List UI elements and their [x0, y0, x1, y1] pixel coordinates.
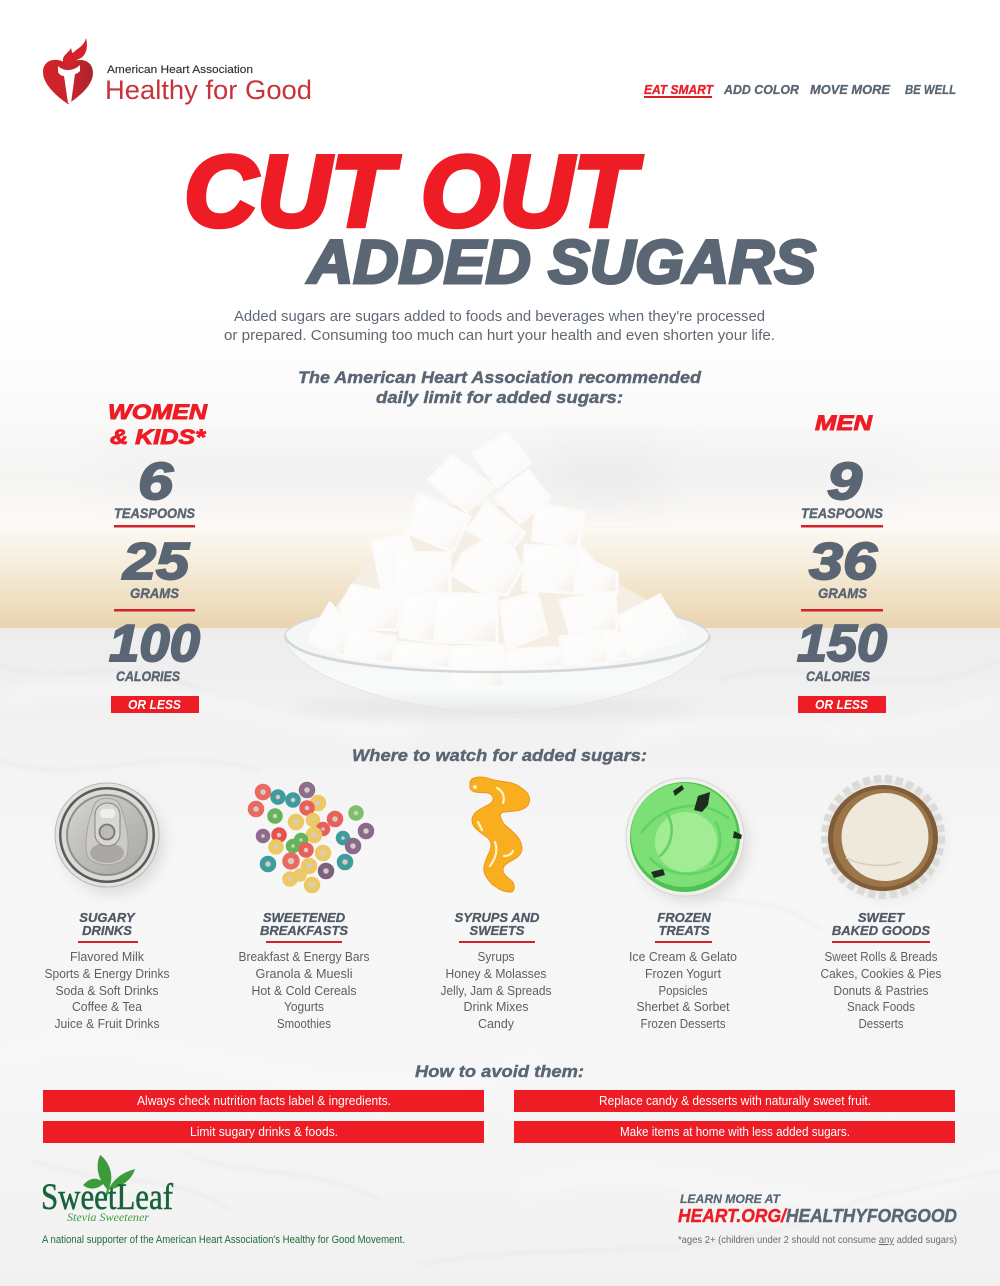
logo: SweetLeaf: [41, 1155, 405, 1246]
category title: sweet baked goods: [832, 910, 930, 943]
badge: or less: [111, 696, 199, 713]
category title: sweet baked goods: SWEET: [858, 910, 905, 925]
heading: recommended daily limit: daily limit for added sugars:: [376, 388, 623, 407]
category title: sweet baked goods: BAKED GOODS: [832, 923, 930, 938]
category title: frozen treats: TREATS: [658, 923, 710, 938]
tip: check nutrition label: Always check nutrition facts label & ingredients.: [137, 1094, 391, 1108]
category title: frozen treats: FROZEN: [657, 910, 711, 925]
icon: frosted cupcake: [825, 779, 944, 899]
category title: sweetened breakfasts: SWEETENED: [263, 910, 346, 925]
list: sweet baked goods: Sweet Rolls & Breads: [824, 950, 938, 964]
panel: women and kids limits: [108, 401, 208, 713]
badge: or less: OR LESS: [815, 697, 868, 712]
text: national supporter: A national supporter of the American Heart Association's Healthy for Good Movement.: [42, 1234, 405, 1246]
stat: 9 teaspoons: 9: [827, 453, 862, 511]
tip: check nutrition label: [43, 1090, 484, 1112]
sugar cubes: [308, 432, 687, 687]
tip: replace candy: [514, 1090, 955, 1112]
badge: or less: OR LESS: [128, 697, 181, 712]
text: Stevia Sweetener: Stevia Sweetener: [67, 1212, 150, 1224]
icon: fruit cereal loops: [250, 784, 372, 890]
panel: men limits: [797, 412, 887, 713]
stat: 9 teaspoons: [801, 453, 884, 521]
list: sweetened breakfasts: Yogurts: [284, 1000, 324, 1014]
plate back rim: [285, 600, 709, 672]
background: marble counter: [0, 628, 1000, 1286]
heading: women and kids: [108, 401, 208, 449]
icon: syrup drizzle: [470, 777, 530, 892]
list: frozen treats: Frozen Desserts: [640, 1017, 726, 1031]
tip: limit sugary drinks: [43, 1121, 484, 1143]
category title: frozen treats: [655, 910, 712, 943]
category title: sweetened breakfasts: [260, 910, 348, 943]
text: Healthy for Good: Healthy for Good: [105, 75, 312, 105]
plate front rim: [285, 636, 710, 672]
stat: 150 calories: CALORIES: [806, 668, 871, 684]
panel: sugary drinks: [44, 783, 170, 1031]
category title: sugary drinks: DRINKS: [82, 923, 132, 938]
tips: how to avoid added sugars: [43, 1090, 955, 1143]
stat: 25 grams: 25: [122, 533, 190, 591]
call to action: learn more: [678, 1192, 957, 1246]
heading: how to avoid them: How to avoid them:: [415, 1062, 584, 1081]
list: frozen treats: Popsicles: [658, 984, 708, 998]
tip: limit sugary drinks: Limit sugary drinks & foods.: [190, 1125, 338, 1139]
list: sweetened breakfasts: [238, 950, 370, 1031]
list: sugary drinks: [44, 950, 170, 1031]
heading: women and kids: WOMEN: [108, 401, 208, 424]
text: SweetLeaf: SweetLeaf: [41, 1177, 174, 1218]
nav item: Be Well: BE WELL: [905, 82, 956, 97]
stat: 36 grams: GRAMS: [818, 585, 868, 601]
category title: syrups and sweets: [455, 910, 540, 943]
icon: heart and torch: [43, 38, 93, 104]
tip: replace candy: Replace candy & desserts with naturally sweet fruit.: [599, 1094, 871, 1108]
list: sweet baked goods: Donuts & Pastries: [834, 984, 928, 998]
stat: 150 calories: 150: [797, 615, 887, 673]
panel: sweetened breakfasts: [238, 784, 372, 1031]
text: learn more at: LEARN MORE AT: [680, 1192, 782, 1206]
navigation: [644, 82, 956, 98]
nav item: Eat Smart (active): EAT SMART: [644, 82, 714, 97]
icon: stevia leaves: [83, 1155, 135, 1197]
heading: men: MEN: [815, 412, 873, 435]
list: sweetened breakfasts: Hot & Cold Cereals: [252, 984, 356, 998]
list: sweet baked goods: Snack Foods: [847, 1000, 915, 1014]
list: sweet baked goods: Desserts: [858, 1017, 904, 1031]
badge: or less: [798, 696, 886, 713]
text: American Heart Association: American Heart Association: [107, 64, 253, 76]
list: sugary drinks: Coffee & Tea: [72, 1000, 142, 1014]
background: blurred kitchen wall: [0, 0, 1000, 630]
list: sweet baked goods: [820, 950, 942, 1031]
list: sweetened breakfasts: Breakfast & Energy Bars: [238, 950, 370, 964]
stat: 36 grams: 36: [809, 533, 878, 591]
plate shadow: [292, 699, 702, 717]
list: syrups and sweets: [440, 950, 552, 1031]
photo: plate of sugar cubes: [284, 432, 711, 717]
icon: green ice cream cup: [626, 778, 748, 902]
stat: 6 teaspoons: [114, 453, 196, 521]
panel: sweet baked goods: [820, 779, 944, 1031]
icon: soda can top: [55, 783, 164, 894]
stat: 25 grams: GRAMS: [130, 585, 180, 601]
list: sweetened breakfasts: Granola & Muesli: [256, 967, 352, 981]
title: [184, 136, 816, 296]
text: website: HEART.ORG/HEALTHYFORGOOD: [678, 1205, 957, 1226]
panel: frozen treats: [626, 778, 748, 1031]
intro paragraph: Added sugars are sugars added to foods and beverages when they're processed: [234, 309, 765, 325]
title line: Added Sugars: ADDED SUGARS: [306, 228, 816, 296]
intro paragraph: or prepared. Consuming too much can hurt your health and even shorten your life.: [224, 328, 775, 344]
title line: Cut Out: CUT OUT: [184, 136, 642, 248]
category title: syrups and sweets: SWEETS: [470, 923, 525, 938]
list: sweetened breakfasts: Smoothies: [277, 1017, 331, 1031]
logo: American Heart Association Healthy for Good: [43, 38, 312, 105]
category title: syrups and sweets: SYRUPS AND: [455, 910, 540, 925]
list: sweet baked goods: Cakes, Cookies & Pies: [820, 967, 942, 981]
intro paragraph: [224, 309, 775, 344]
tip: make items at home: [514, 1121, 955, 1143]
category title: sugary drinks: SUGARY: [79, 910, 136, 925]
category title: sugary drinks: [78, 910, 138, 943]
list: sugary drinks: Juice & Fruit Drinks: [54, 1017, 160, 1031]
stat: 6 teaspoons: TEASPOONS: [114, 505, 196, 521]
list: sugary drinks: Flavored Milk: [70, 950, 145, 964]
footnote: *ages 2+ (children under 2 should not consume any added sugars): [678, 1234, 957, 1246]
plate bowl: [284, 636, 711, 713]
stat: 6 teaspoons: 6: [138, 453, 174, 511]
list: frozen treats: [629, 950, 737, 1031]
nav item: Move More: MOVE MORE: [810, 82, 890, 97]
tip: make items at home: Make items at home with less added sugars.: [620, 1125, 850, 1139]
heading: where to watch: Where to watch for added sugars:: [352, 746, 647, 765]
heading: recommended daily limit: The American Heart Association recommended: [298, 368, 702, 387]
panel: syrups and sweets: [440, 777, 552, 1031]
list: frozen treats: Ice Cream & Gelato: [629, 950, 737, 964]
list: sugary drinks: Sports & Energy Drinks: [44, 967, 170, 981]
list: syrups and sweets: Drink Mixes: [464, 1000, 528, 1014]
stat: 100 calories: CALORIES: [116, 668, 181, 684]
list: syrups and sweets: Syrups: [478, 950, 514, 964]
list: frozen treats: Sherbet & Sorbet: [636, 1000, 730, 1014]
list: syrups and sweets: Jelly, Jam & Spreads: [440, 984, 552, 998]
list: sugary drinks: Soda & Soft Drinks: [56, 984, 158, 998]
nav item: Add Color: ADD COLOR: [723, 82, 800, 97]
list: syrups and sweets: Candy: [478, 1017, 515, 1031]
stat: 100 calories: 100: [109, 615, 200, 673]
stat: 9 teaspoons: TEASPOONS: [801, 505, 884, 521]
heading: women and kids: & KIDS*: [110, 426, 206, 449]
list: frozen treats: Frozen Yogurt: [645, 967, 722, 981]
category title: sweetened breakfasts: BREAKFASTS: [260, 923, 348, 938]
list: syrups and sweets: Honey & Molasses: [446, 967, 546, 981]
heading: recommended daily limit: [298, 368, 702, 407]
